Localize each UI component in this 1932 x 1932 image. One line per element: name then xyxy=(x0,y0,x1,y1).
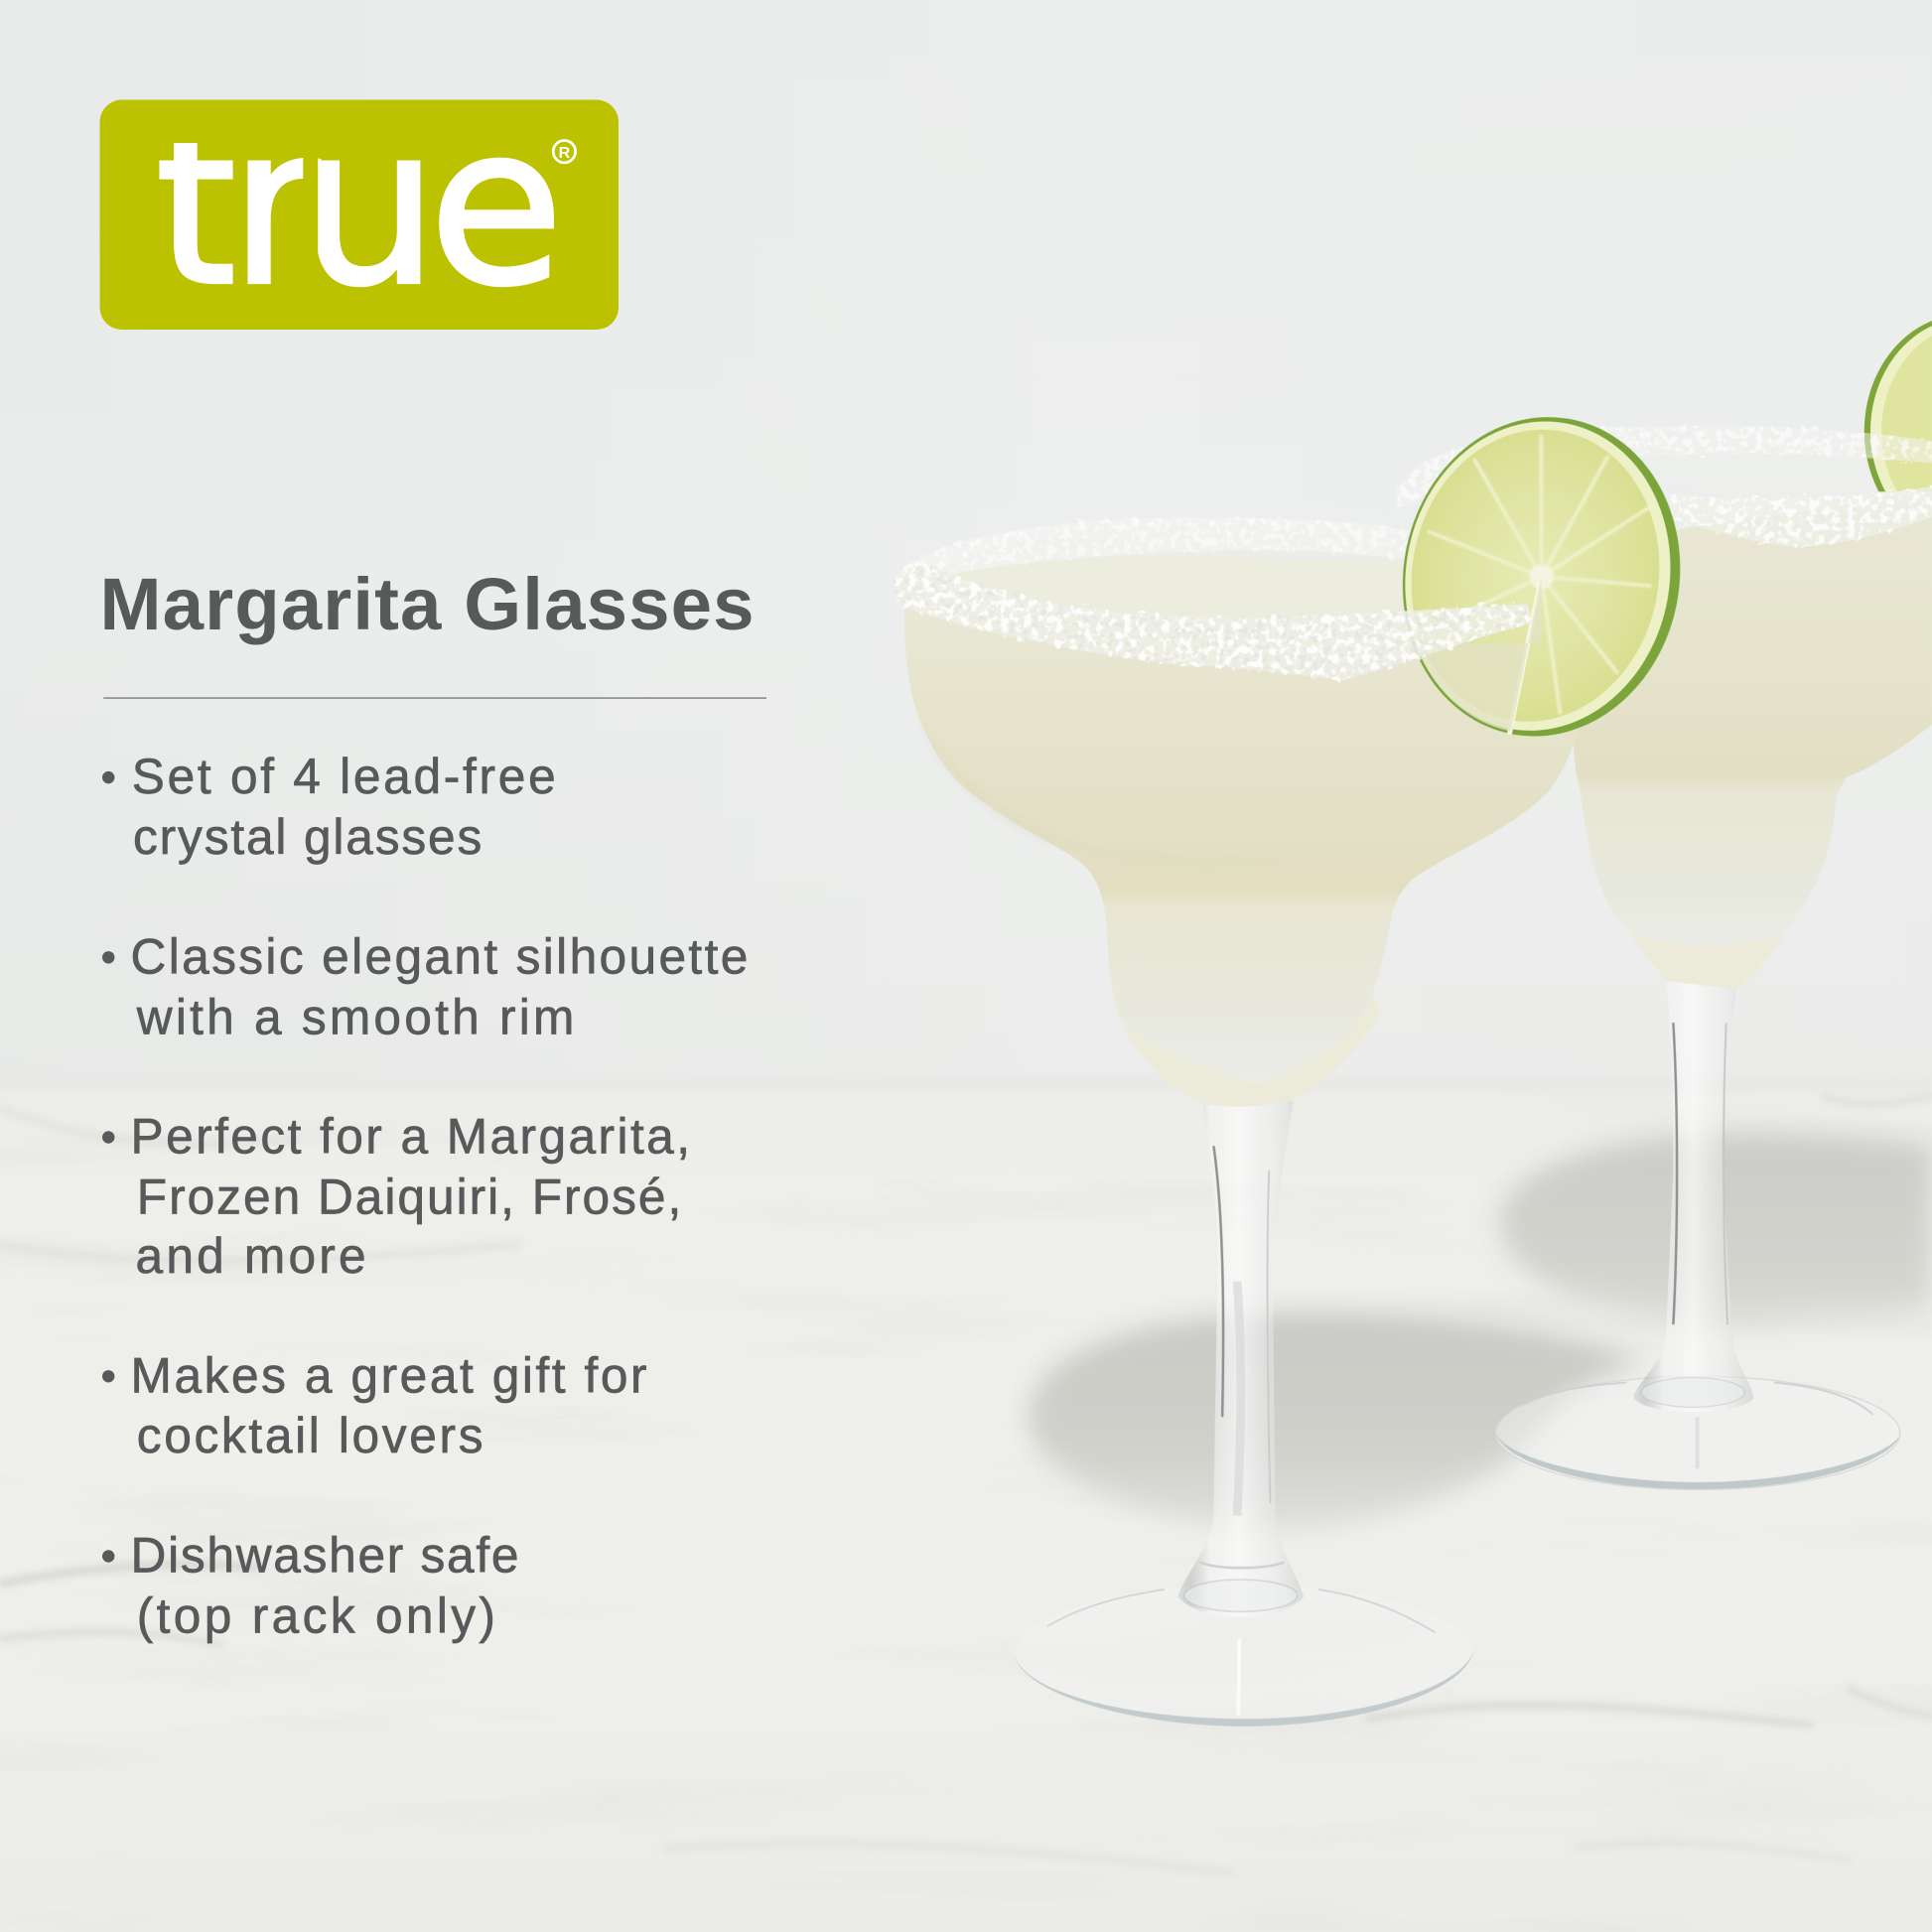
front glass shading xyxy=(918,709,1330,866)
back glass stem xyxy=(1634,980,1753,1413)
bullet 4: Makes a great gift for xyxy=(131,1347,647,1403)
background: wall and marble table xyxy=(0,1090,1932,1929)
bullet 3 xyxy=(102,1109,690,1284)
bullet 4: cocktail lovers xyxy=(137,1408,483,1463)
back glass inside rim xyxy=(1405,426,1932,499)
glass: back margarita xyxy=(1396,314,1932,1489)
front glass clear bowl bottom xyxy=(1110,975,1380,1107)
bullet 1 xyxy=(102,749,556,865)
bullet 2: Classic elegant silhouette xyxy=(131,928,748,984)
front liquid surface xyxy=(936,557,1417,621)
divider xyxy=(103,697,766,699)
back glass lower clear bowl xyxy=(1629,930,1787,990)
registered mark xyxy=(553,140,576,163)
bullet 3: Frozen Daiquiri, Frosé, xyxy=(137,1169,681,1224)
bullet 2 xyxy=(102,928,748,1044)
bullet 2: with a smooth rim xyxy=(136,989,574,1044)
front glass foot xyxy=(1016,1585,1473,1726)
back lime slice xyxy=(1864,321,1932,492)
lime part seen through glass xyxy=(1421,579,1541,731)
bullet 1: Set of 4 lead-free xyxy=(132,749,556,804)
back glass foot xyxy=(1496,1376,1901,1489)
back glass drink xyxy=(1573,492,1932,956)
title: Margarita Glasses xyxy=(100,563,755,645)
bullet 4 xyxy=(102,1347,647,1463)
bullet 3: and more xyxy=(136,1228,366,1284)
back glass salt rim xyxy=(1396,426,1932,547)
bullet 5: Dishwasher safe xyxy=(131,1528,518,1584)
glass: front margarita xyxy=(895,517,1578,1726)
bullet list xyxy=(102,749,748,1643)
bullet 5 xyxy=(102,1528,518,1643)
shadow: front glass xyxy=(1029,1311,1645,1528)
front glass drink xyxy=(904,604,1578,1084)
front glass salt rim xyxy=(895,565,1533,680)
shadow: back glass xyxy=(1499,1134,1932,1328)
lime cut slit xyxy=(1509,582,1540,735)
bullet 5: (top rack only) xyxy=(137,1587,495,1643)
registered mark: R xyxy=(559,144,571,162)
logo wordmark: true xyxy=(155,79,564,335)
front glass stem xyxy=(1177,1100,1304,1617)
bullet 3: Perfect for a Margarita, xyxy=(131,1109,690,1165)
logo letter trims xyxy=(148,117,318,292)
front glass back salt rim xyxy=(895,517,1430,579)
bullet 1: crystal glasses xyxy=(133,809,482,865)
front lime slice xyxy=(1402,417,1680,737)
logo xyxy=(100,79,619,335)
front glass inside rim xyxy=(918,523,1442,621)
